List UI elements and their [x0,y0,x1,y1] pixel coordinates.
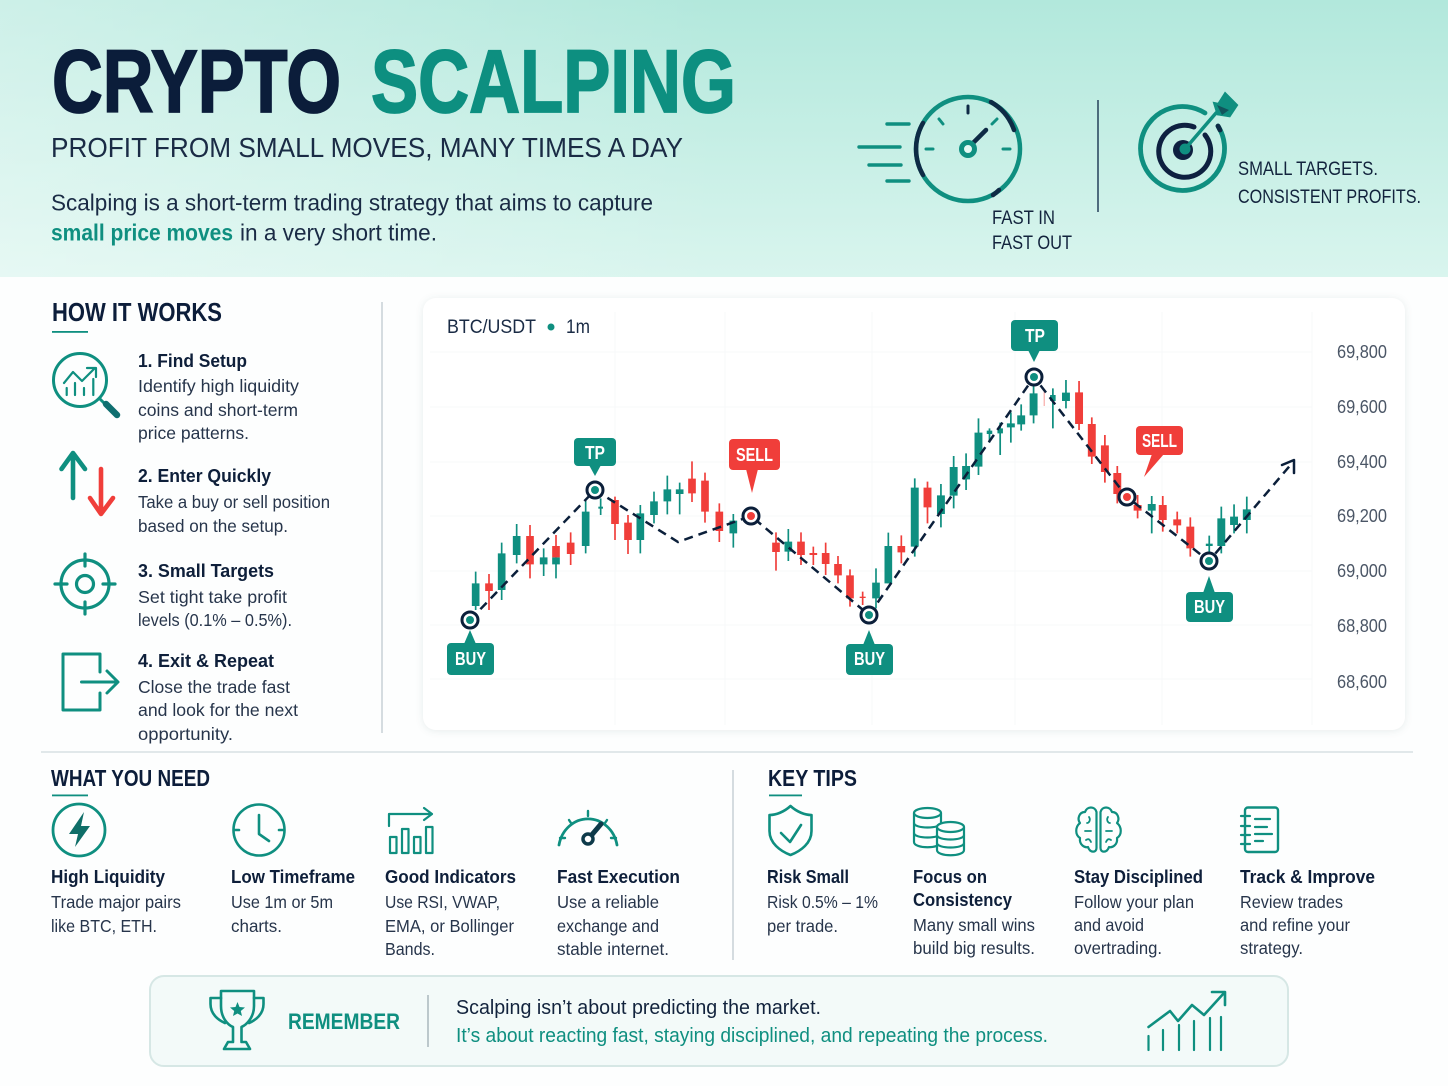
price axis labels: 69,600 [1337,397,1387,417]
tip: track and improve: Track & Improve [1240,866,1375,887]
need: good indicators: Bands. [385,939,435,959]
step 2 text [138,465,330,536]
icon: growth chart [1148,992,1225,1050]
step 1 text: 1. Find Setup [138,350,247,371]
need: fast execution [557,866,680,959]
price axis labels: 69,000 [1337,561,1387,581]
step 1 text: Identify high liquidity [138,376,299,396]
callout: tp 1: TP [585,443,605,463]
callout: buy 2: BUY [854,649,885,669]
icon: notebook [1241,808,1278,852]
step 2 text: based on the setup. [138,516,288,536]
tip: focus on consistency [913,866,1035,958]
tip: focus on consistency: Many small wins [913,915,1035,935]
price axis labels: 69,200 [1337,506,1387,526]
panel: header [0,0,1448,277]
intro text: in a very short time. [240,220,437,246]
tip: track and improve: and refine your [1240,915,1350,935]
intro text: Scalping is a short-term trading strategy that aims to capture [51,190,653,216]
price axis labels: 69,800 [1337,342,1387,362]
tip: risk small: Risk 0.5% – 1% [767,892,878,912]
callout: buy 1: BUY [455,649,486,669]
icon: shield [770,806,812,855]
label: fast in fast out: FAST IN [992,207,1055,229]
callout: sell 1 [729,439,780,493]
need: good indicators: EMA, or Bollinger [385,916,514,936]
need: low timeframe: charts. [231,916,282,936]
heading: how it works: HOW IT WORKS [52,297,222,327]
remember message [456,997,1048,1047]
panel: price chart [423,298,1405,730]
need: high liquidity: High Liquidity [51,866,166,887]
need: low timeframe: Use 1m or 5m [231,892,333,912]
need: fast execution: exchange and [557,916,659,936]
tip: stay disciplined: and avoid [1074,915,1144,935]
step 4 text: and look for the next [138,700,298,720]
callout: sell 2 [1136,426,1183,477]
tip: stay disciplined: Follow your plan [1074,892,1194,912]
step 3 text: levels (0.1% – 0.5%). [138,610,292,630]
title: CRYPTO [52,31,341,131]
title: SCALPING [371,31,736,131]
step 4 text: opportunity. [138,724,233,744]
step 4 icon: exit [63,654,118,710]
step 3 text [138,560,292,630]
label: small targets: SMALL TARGETS. [1238,158,1378,180]
step 2 icon: up and down arrows [62,453,113,514]
step 2 text: 2. Enter Quickly [138,465,272,486]
step 1 text [138,350,299,443]
icon: clock [234,804,284,856]
step 1 text: price patterns. [138,423,249,443]
remember message: Scalping isn’t about predicting the market. [456,997,821,1019]
dashed trade path with arrow [470,377,1294,620]
chart pair label: 1m [566,317,590,338]
tip: focus on consistency: build big results. [913,938,1035,958]
callout: buy 2 [846,630,893,675]
need: good indicators [385,866,516,959]
intro text: small price moves [51,220,233,246]
price axis labels: 68,600 [1337,672,1387,692]
callout: tp 1 [574,438,616,476]
panel: key tips [767,765,1375,958]
price axis labels: 68,800 [1337,616,1387,636]
panel: remember banner [150,976,1288,1066]
callout: sell 1: SELL [736,445,773,465]
need: fast execution: Use a reliable [557,892,659,912]
intro text [51,190,653,246]
candlesticks right [915,380,1247,557]
callout: buy 3 [1186,576,1233,622]
price axis labels: 69,400 [1337,452,1387,472]
tip: stay disciplined [1074,866,1203,958]
tip: track and improve [1240,866,1375,958]
need: good indicators: Use RSI, VWAP, [385,892,500,912]
callout: buy 1 [447,630,494,675]
need: low timeframe [231,866,355,936]
tip: track and improve: strategy. [1240,938,1303,958]
remember message: It’s about reacting fast, staying disciplined, and repeating the process. [456,1025,1048,1047]
step 4 text [138,650,298,744]
label: small targets [1238,158,1421,208]
need: fast execution: stable internet. [557,939,669,959]
panel: how it works [52,297,330,744]
tip: track and improve: Review trades [1240,892,1343,912]
entry and exit markers [462,369,1217,628]
label: fast in fast out [992,207,1072,254]
tip: risk small: per trade. [767,916,838,936]
icon: fast gauge [559,811,617,845]
icon: trophy [210,991,264,1049]
need: low timeframe: Low Timeframe [231,866,355,887]
tip: stay disciplined: overtrading. [1074,938,1162,958]
callout: sell 2: SELL [1142,431,1177,451]
title [52,31,736,131]
icon: indicators [389,808,432,853]
tip: risk small [767,866,878,936]
candlesticks left [476,461,901,610]
need: good indicators: Good Indicators [385,866,516,887]
tip: risk small: Risk Small [767,866,849,887]
step 3 text: 3. Small Targets [138,560,274,581]
chart pair label [447,317,590,338]
step 1 text: coins and short-term [138,400,298,420]
tip: stay disciplined: Stay Disciplined [1074,866,1203,887]
icon: coin stacks [914,808,964,855]
icon: speed gauge [859,97,1020,201]
need: fast execution: Fast Execution [557,866,680,887]
step 4 text: 4. Exit & Repeat [138,650,274,671]
subtitle: PROFIT FROM SMALL MOVES, MANY TIMES A DAY [51,132,683,163]
heading: what you need: WHAT YOU NEED [51,765,210,791]
step 4 text: Close the trade fast [138,677,290,697]
need: high liquidity: Trade major pairs [51,892,181,912]
panel: what you need [51,765,680,959]
remember label: REMEMBER [288,1009,400,1034]
need: high liquidity: like BTC, ETH. [51,916,157,936]
heading: key tips: KEY TIPS [768,765,857,791]
step 2 text: Take a buy or sell position [138,492,330,512]
chart pair label: BTC/USDT [447,317,536,338]
step 3 text: Set tight take profit [138,587,287,607]
callout: tp 2: TP [1025,326,1045,346]
tip: focus on consistency: Consistency [913,889,1013,910]
callout: buy 3: BUY [1194,597,1225,617]
icon: target with arrow [1141,92,1238,190]
step 1 icon: magnifier [54,354,117,415]
price axis labels [1337,342,1387,692]
label: fast in fast out: FAST OUT [992,232,1072,254]
step 3 icon: crosshair [55,554,115,614]
need: high liquidity [51,866,181,936]
callout: tp 2 [1011,320,1058,362]
icon: lightning [53,804,105,856]
tip: focus on consistency: Focus on [913,866,987,887]
icon: brain [1076,808,1121,852]
